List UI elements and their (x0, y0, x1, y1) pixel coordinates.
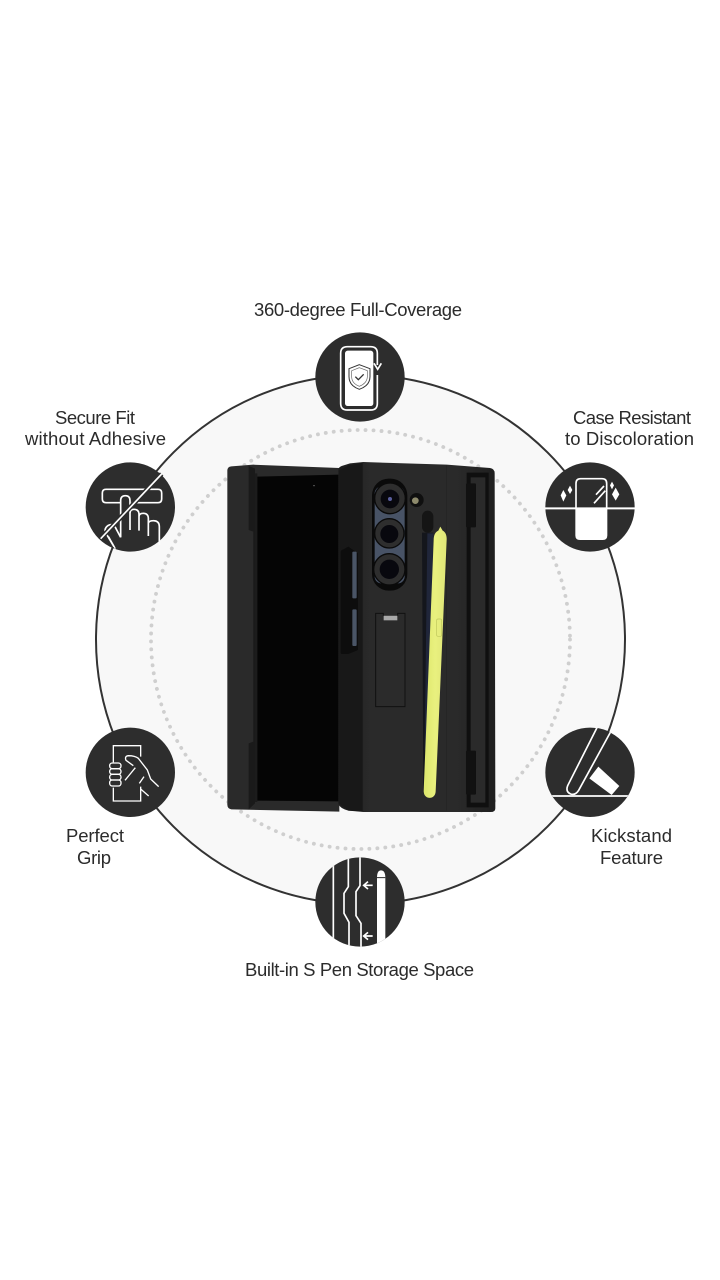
label: Secure Fit without Adhesive: Secure Fit (55, 407, 135, 428)
icon: 360-degree full coverage (315, 332, 405, 422)
label: Case Resistant to Discoloration (565, 407, 694, 449)
label: Secure Fit without Adhesive: without Adhesive (24, 428, 166, 449)
icon: case resistant to discoloration (545, 462, 635, 552)
label: Perfect Grip (66, 825, 124, 868)
label: Built-in S Pen Storage Space: Built-in S Pen Storage Space (245, 959, 474, 980)
label: Kickstand Feature: Feature (600, 847, 663, 868)
right case body (338, 462, 495, 812)
label: 360-degree Full-Coverage: 360-degree Full-Coverage (254, 299, 462, 320)
icon: secure fit without adhesive (86, 462, 175, 552)
left folding panel (227, 465, 339, 812)
icon: kickstand feature (545, 725, 635, 817)
kickstand (376, 613, 405, 707)
icon: built-in S Pen storage space (315, 855, 405, 948)
label: Case Resistant to Discoloration: Case Resistant (573, 407, 691, 428)
product: foldable phone in black case with yellow S Pen (227, 462, 495, 812)
label: Perfect Grip: Perfect (66, 825, 124, 846)
label: Case Resistant to Discoloration: to Discoloration (565, 428, 694, 449)
yellow S Pen (424, 527, 447, 798)
feature ring (96, 375, 625, 904)
icon: perfect grip (86, 728, 175, 817)
dark pen slot (422, 511, 433, 793)
label: Kickstand Feature: Kickstand (591, 825, 672, 846)
camera module (372, 479, 424, 591)
right side hinge (447, 465, 489, 811)
label: Secure Fit without Adhesive (24, 407, 166, 449)
label: Perfect Grip: Grip (77, 847, 111, 868)
label: Kickstand Feature (591, 825, 672, 868)
